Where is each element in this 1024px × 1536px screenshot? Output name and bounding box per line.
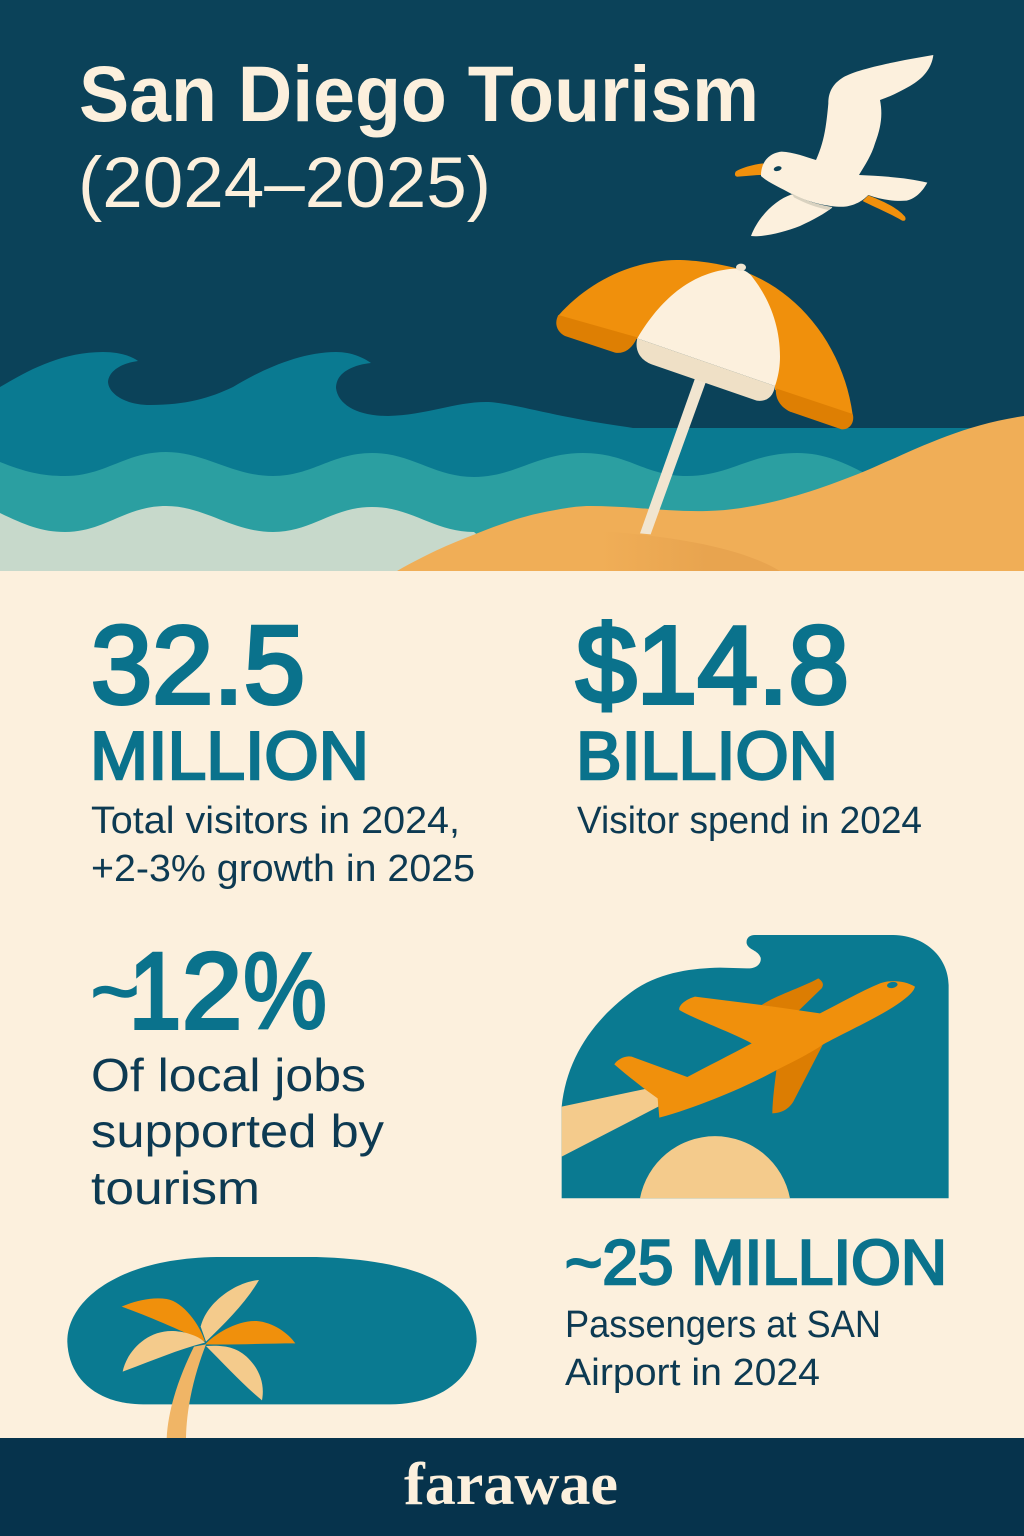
seagull beak [735,163,763,177]
jobs number: % [243,930,327,1051]
jobs number: ~ [91,949,139,1034]
stat: total visitors [90,604,475,890]
stat: visitor spend [576,604,922,842]
umbrella right orange panel [747,273,853,415]
icon: beach umbrella [556,260,853,534]
jobs description: tourism [91,1162,260,1214]
airplane far wing [762,978,823,1011]
passengers description [565,1304,881,1394]
title: San Diego Tourism [79,49,759,138]
visitors description: Total visitors in 2024, [91,800,460,842]
sun [640,1136,790,1198]
passengers number: ~25 MILLION [565,1228,947,1298]
ocean foam wave [0,506,520,571]
jobs description: supported by [91,1105,384,1157]
sand mound shadow [600,531,780,571]
jobs description [91,1049,384,1214]
palm leaf left [123,1331,205,1372]
seagull lower wing [751,194,832,236]
subtitle: years: (2024–2025) [78,144,491,223]
airplane window [887,981,898,989]
seagull foot [863,195,906,221]
umbrella left orange panel [558,260,753,339]
visitors number: 32.5 [91,604,305,727]
spend description: Visitor spend in 2024 [577,800,922,842]
palm panel background [67,1257,477,1404]
visitors unit: MILLION [90,718,369,794]
passengers description: Airport in 2024 [565,1352,820,1394]
palm leaf top left [122,1298,205,1342]
stat: airport passengers [565,1228,947,1394]
ocean back wave [0,352,1024,571]
umbrella right valance [776,388,853,429]
panel: hero beach scene [0,0,1024,571]
seagull wing shadow [792,193,832,210]
beach sand dune [397,416,1024,571]
palm trunk [167,1344,206,1438]
visitors description [91,800,475,890]
spend unit: BILLION [576,718,838,794]
palm leaf top right [201,1280,259,1342]
jobs number: 1 [129,930,181,1051]
umbrella left valance [556,315,637,353]
umbrella cream panel [637,269,780,386]
ocean middle wave [0,452,870,571]
jobs description: Of local jobs [91,1049,366,1101]
footer band [0,1438,1024,1536]
palm leaf lower right [206,1346,263,1400]
airplane panel background [562,935,949,1198]
icon: airplane panel [562,935,949,1198]
stat: local jobs [91,930,384,1214]
seagull body and upper wing [761,55,933,207]
footer brand name: farawae [404,1451,618,1517]
icon: seagull [735,55,933,236]
jobs number [91,930,327,1051]
airplane body [614,981,915,1118]
airplane near wing [772,1045,823,1113]
spend number: $14.8 [576,604,849,727]
passengers description: Passengers at SAN [565,1304,881,1346]
visitors description: +2-3% growth in 2025 [91,848,475,890]
seagull eye [773,165,782,172]
palm leaf right [205,1321,295,1344]
umbrella top knob [736,264,746,271]
umbrella pole [640,378,706,534]
airplane contrail [562,1089,658,1157]
night sky background [0,0,1024,571]
icon: palm tree panel [67,1257,477,1438]
umbrella cream valance [637,338,775,401]
jobs number: 2 [182,930,242,1051]
